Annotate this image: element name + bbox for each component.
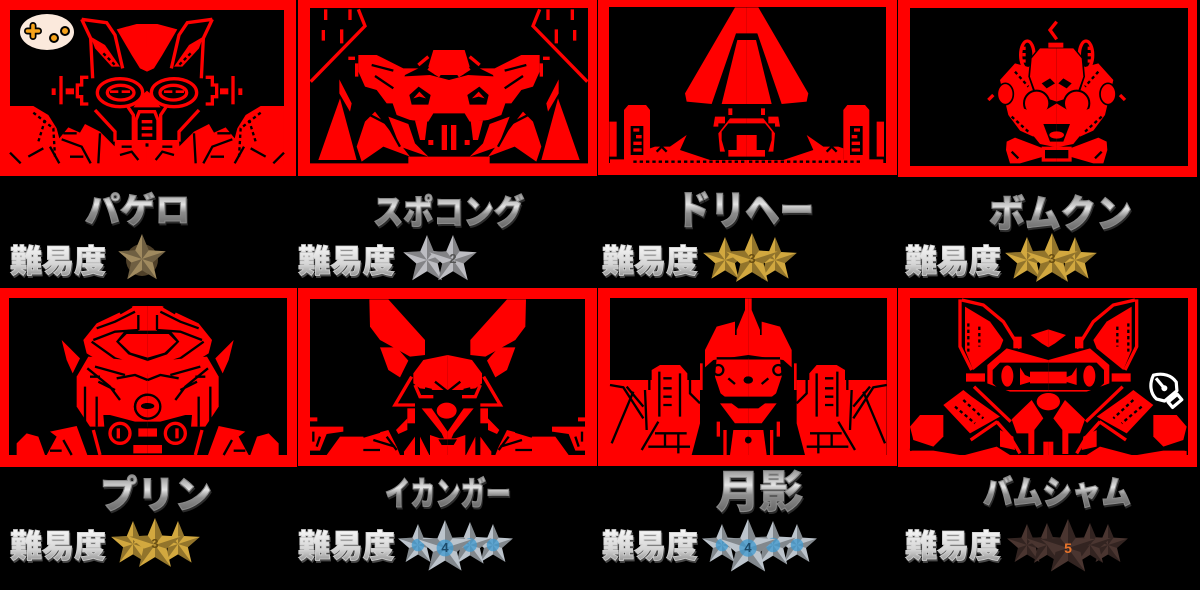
panel: ドリヘー xyxy=(598,0,897,282)
frame xyxy=(298,288,597,466)
name: スポコング xyxy=(373,193,524,232)
stars: 2 silver xyxy=(403,235,477,280)
pen nib icon xyxy=(1143,367,1187,412)
sprite: プリン xyxy=(17,306,279,455)
stars: 5 dark xyxy=(1007,519,1128,571)
difficulty label: 難易度 xyxy=(905,243,1001,279)
stars: 4 blue xyxy=(702,519,817,571)
sprite: ドリヘー xyxy=(609,7,884,165)
panel: 月影 xyxy=(598,288,897,571)
name: イカンガー xyxy=(385,475,511,512)
panel: ボムクン xyxy=(898,0,1197,282)
frame xyxy=(598,0,897,175)
frame xyxy=(0,0,296,176)
sprite: バムシャム xyxy=(910,299,1187,456)
difficulty label: 難易度 xyxy=(905,528,1001,564)
stars: 4 blue: 4 xyxy=(744,540,752,555)
name: パゲロ xyxy=(85,191,190,230)
stars: 3 gold: 3 xyxy=(1048,251,1056,266)
panel: パゲロ xyxy=(0,0,296,279)
frame xyxy=(898,0,1197,177)
frame xyxy=(598,288,897,466)
difficulty label: 難易度 xyxy=(298,243,395,279)
stars: 3 gold: 3 xyxy=(748,251,756,266)
sprite: 月影 xyxy=(610,298,887,455)
stars: 4 blue xyxy=(398,520,513,571)
difficulty label: 難易度 xyxy=(602,528,698,564)
stars: 5 dark: 5 xyxy=(1064,540,1072,556)
sprite: スポコング xyxy=(310,9,588,166)
frame xyxy=(298,0,597,176)
difficulty label: 難易度 xyxy=(10,528,106,564)
panel: スポコング xyxy=(298,0,597,280)
panel: バムシャム xyxy=(898,288,1197,571)
stars: 3 gold xyxy=(703,233,797,282)
panel: プリン xyxy=(0,288,297,567)
stars: 3 gold: 3 xyxy=(151,536,159,551)
name: バムシャム xyxy=(983,474,1131,511)
stars: 2 silver: 2 xyxy=(449,251,457,266)
difficulty label: 難易度 xyxy=(10,243,106,279)
stars: 1 bronze xyxy=(118,234,166,279)
frame xyxy=(898,288,1197,467)
name: 月影 xyxy=(716,468,803,517)
sprite: イカンガー xyxy=(310,299,585,455)
difficulty label: 難易度 xyxy=(298,528,395,564)
name: ボムクン xyxy=(989,194,1132,236)
panel: イカンガー xyxy=(298,288,597,571)
stars: 3 gold xyxy=(1005,233,1097,282)
name: ドリヘー xyxy=(676,189,814,233)
controller badge icon xyxy=(20,14,74,50)
stars: 4 blue: 4 xyxy=(441,540,449,555)
sprite: ボムクン xyxy=(988,22,1125,163)
difficulty label: 難易度 xyxy=(602,243,698,279)
name: プリン xyxy=(100,475,212,517)
frame xyxy=(0,288,297,467)
sprite: パゲロ xyxy=(10,19,284,165)
stars: 3 gold xyxy=(111,518,200,567)
